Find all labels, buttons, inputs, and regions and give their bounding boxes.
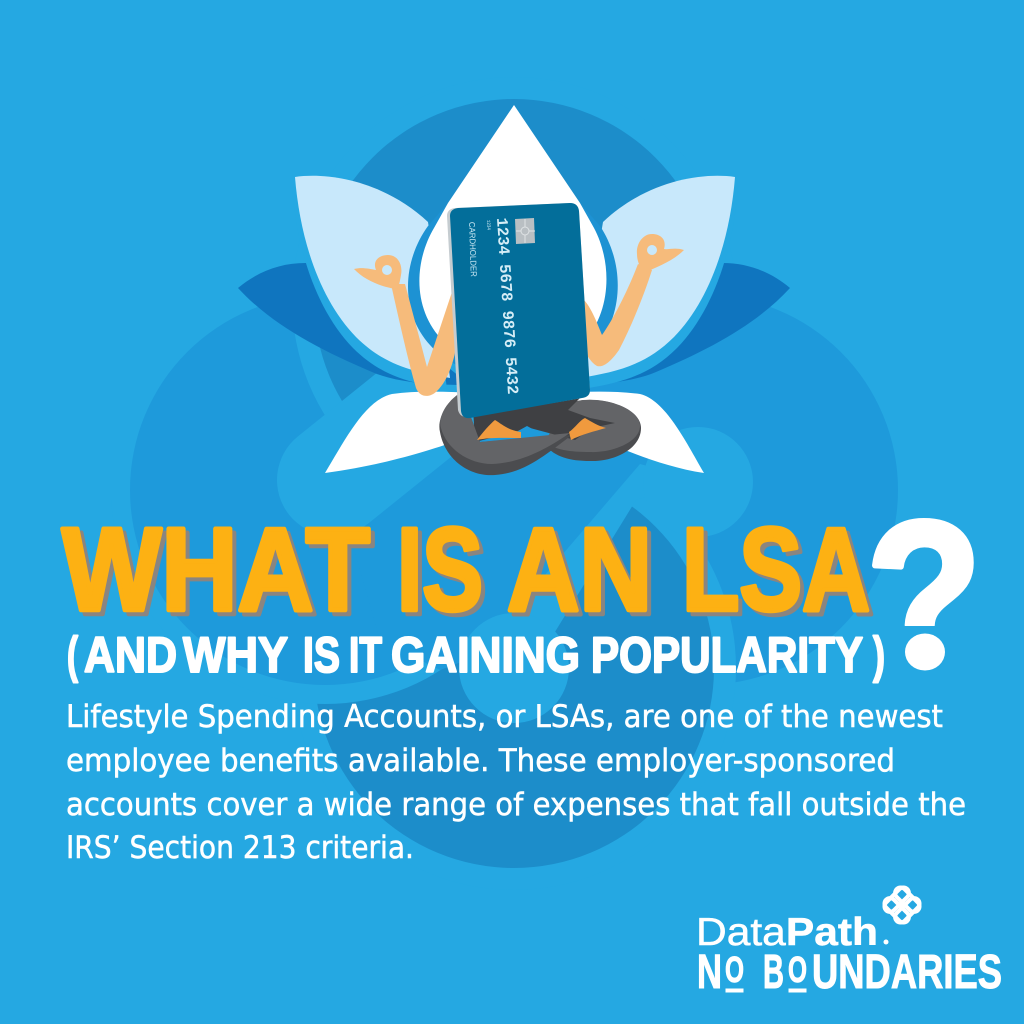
chip — [515, 218, 535, 244]
title shadow: WHAT — [66, 508, 374, 640]
body paragraph: IRS’ Section 213 criteria. — [66, 830, 414, 866]
subtitle: GAINING — [391, 627, 580, 683]
tagline: No Boundaries: O — [725, 949, 744, 990]
subtitle — [67, 627, 885, 683]
title letters: AN — [507, 504, 652, 636]
small card digits: 1234 — [485, 220, 492, 230]
tagline: No Boundaries — [697, 946, 1002, 999]
dark blue petals — [238, 263, 790, 385]
title letters — [62, 504, 870, 636]
body paragraph: Lifestyle Spending Accounts, or LSAs, are one of the newest — [66, 699, 943, 735]
petal separator strips — [292, 187, 738, 389]
subtitle: IS — [303, 627, 340, 683]
title shadow: IS — [401, 508, 487, 640]
background knot logo — [111, 77, 898, 890]
body paragraph: employee benefits available. These employer-sponsored — [66, 743, 895, 779]
subtitle: ) — [873, 627, 885, 683]
icon: knot — [881, 884, 923, 926]
right arm and hand — [578, 234, 684, 366]
crossed legs — [439, 393, 641, 475]
title shadow: LSA — [686, 508, 874, 640]
title letters: LSA — [682, 504, 870, 636]
body paragraph — [66, 699, 966, 866]
subtitle: WHY — [183, 627, 288, 683]
bottom white petals — [325, 392, 704, 473]
tagline: No Boundaries: O — [788, 949, 807, 990]
title shadow — [66, 508, 874, 640]
title letters: IS — [397, 504, 483, 636]
subtitle: ( — [67, 627, 78, 683]
feet — [477, 418, 606, 440]
lotus flower — [238, 105, 790, 473]
brand logo — [696, 884, 1002, 999]
title — [62, 504, 874, 640]
question mark — [872, 518, 974, 670]
wordmark: DataPath: DataPath — [696, 911, 878, 954]
subtitle: AND — [84, 627, 177, 683]
center white petal with ring — [408, 105, 618, 380]
tagline: No Boundaries: B — [763, 946, 784, 999]
left and right light petals — [295, 176, 735, 378]
left arm and hand — [354, 255, 458, 396]
cardholder label: CARDHOLDER — [467, 222, 479, 277]
title letters: WHAT — [62, 504, 370, 636]
tagline: No Boundaries: N — [697, 946, 722, 999]
credit card — [447, 203, 590, 418]
body paragraph: accounts cover a wide range of expenses that fall outside the — [66, 787, 966, 823]
question mark: ? — [866, 477, 982, 714]
subtitle: IT — [349, 627, 382, 683]
title shadow: AN — [511, 508, 656, 640]
registered dot — [884, 940, 888, 944]
meditating figure — [354, 203, 684, 475]
card number: 1234 5678 9876 5432 — [492, 217, 521, 395]
subtitle: POPULARITY — [591, 627, 863, 683]
